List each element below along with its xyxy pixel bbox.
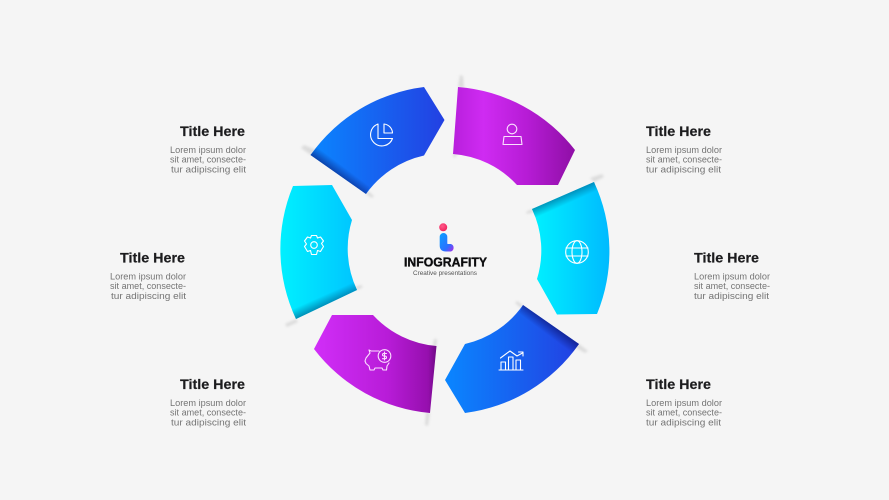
segment: cyan right with globe icon — [532, 182, 609, 314]
text block: bottom right: tur adipiscing elit — [646, 417, 722, 427]
text block: top right: Lorem ipsum dolor — [646, 145, 722, 155]
text block: bottom left: Lorem ipsum dolor — [170, 398, 246, 408]
text block: top right: Title Here — [646, 124, 712, 139]
text block: middle left: Title Here — [120, 250, 186, 266]
tagline: Creative presentations — [413, 270, 477, 277]
icon: pie chart — [371, 124, 392, 146]
text block: bottom right: Title Here — [646, 377, 712, 392]
text block: bottom right: sit amet, consecte- — [646, 408, 722, 418]
text block: middle left: tur adipiscing elit — [111, 291, 187, 301]
text block: top right — [646, 124, 722, 174]
text block: bottom right — [646, 377, 722, 427]
segment: cyan left with gear icon — [280, 185, 357, 319]
text block: bottom left — [170, 377, 247, 427]
text block: middle right: Lorem ipsum dolor — [694, 272, 770, 282]
icon: piggy bank — [365, 350, 391, 370]
text block: bottom left: sit amet, consecte- — [170, 408, 246, 418]
text block: top left: Lorem ipsum dolor — [170, 145, 246, 155]
text block: middle right: sit amet, consecte- — [694, 281, 770, 291]
segment: purple top-right with person icon — [453, 87, 575, 185]
cut shadows — [285, 75, 604, 426]
text block: middle left — [110, 250, 187, 301]
icon: gear — [304, 236, 324, 254]
text block: bottom left: tur adipiscing elit — [171, 417, 247, 427]
segment: blue top-left with pie chart icon — [310, 87, 444, 194]
text block: bottom right: Lorem ipsum dolor — [646, 398, 722, 408]
icon: person — [503, 124, 522, 144]
center logo — [404, 223, 488, 277]
segment: purple bottom-left with piggy bank icon — [314, 315, 436, 413]
text block: middle right: tur adipiscing elit — [694, 291, 770, 301]
text block: bottom left: Title Here — [180, 377, 246, 392]
text block: top left: tur adipiscing elit — [171, 164, 247, 174]
text block: middle right: Title Here — [694, 250, 760, 266]
text block: middle left: Lorem ipsum dolor — [110, 272, 186, 282]
text block: top left — [170, 124, 247, 174]
icon: bar chart — [499, 351, 523, 370]
logo mark — [439, 223, 454, 252]
brand name: INFOGRAFITY — [404, 256, 488, 270]
text block: top right: sit amet, consecte- — [646, 155, 722, 165]
text block: middle right — [694, 250, 770, 301]
segment: blue bottom-right with bar chart icon — [445, 305, 579, 413]
text block: top left: sit amet, consecte- — [170, 155, 246, 165]
icon: globe — [566, 241, 588, 263]
text block: top left: Title Here — [180, 124, 246, 139]
text block: top right: tur adipiscing elit — [646, 164, 722, 174]
text block: middle left: sit amet, consecte- — [110, 281, 186, 291]
